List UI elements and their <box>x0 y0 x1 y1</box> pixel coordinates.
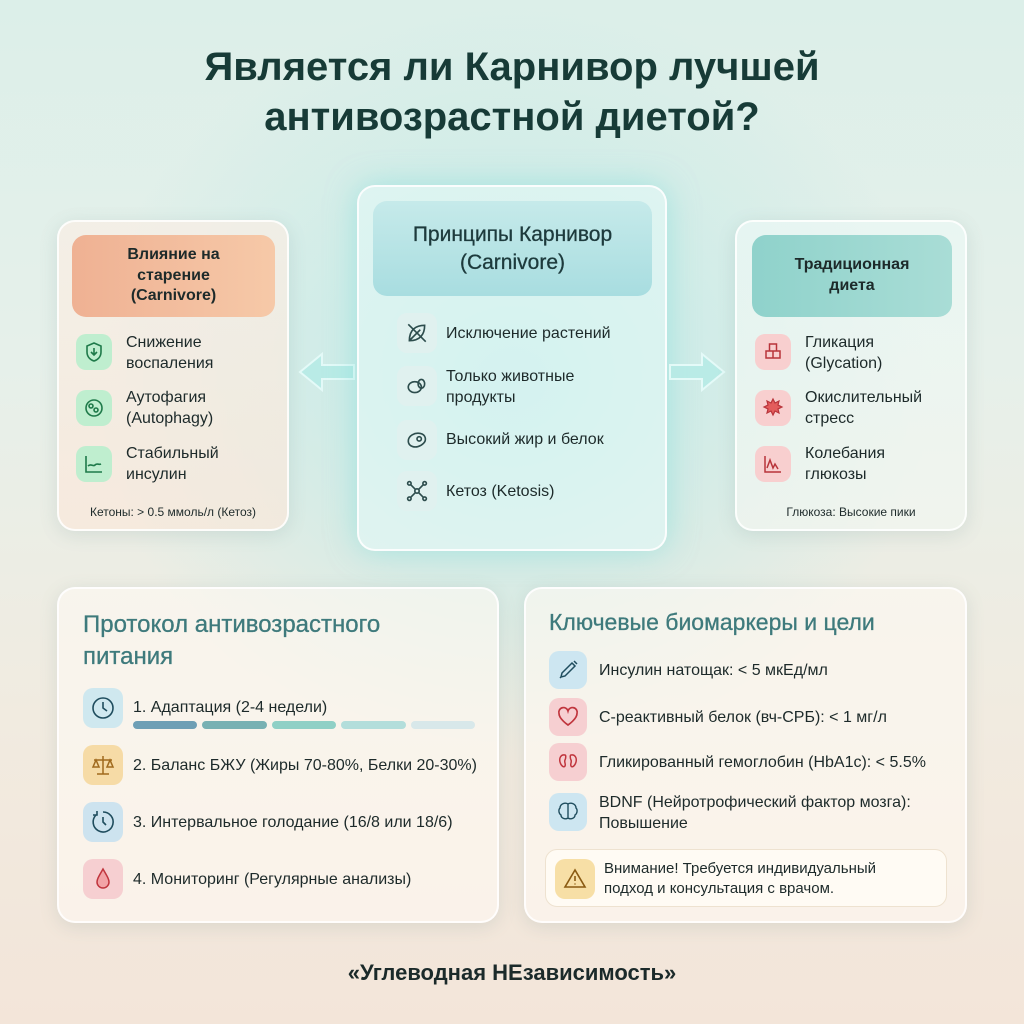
arrow: right <box>669 352 726 392</box>
heading: center: (Carnivore) <box>460 250 565 274</box>
icon: insulin chart <box>76 446 112 482</box>
text: autophagy: (Autophagy) <box>126 410 213 427</box>
text: (Glycation) <box>805 355 882 372</box>
text: Гликированный гемоглобин (HbA1c): < 5.5% <box>599 754 926 771</box>
text <box>805 334 882 372</box>
heading: left: старение <box>137 267 210 284</box>
heading: left: (Carnivore) <box>131 287 216 304</box>
text: BDNF (Нейротрофический фактор мозга): <box>599 794 911 811</box>
heading: protocol: Протокол антивозрастного <box>83 611 380 638</box>
text: Исключение растений <box>446 325 611 342</box>
title <box>204 45 820 139</box>
text: inflammation: воспаления <box>126 355 213 372</box>
icon: no plants <box>397 313 437 353</box>
icon: autophagy <box>76 390 112 426</box>
icon: brain <box>549 793 587 831</box>
arrow: left <box>298 352 355 392</box>
text: autophagy: Аутофагия <box>126 389 206 406</box>
icon: glucose spikes <box>755 446 791 482</box>
text: inflammation <box>126 334 213 372</box>
title: антивозрастной диетой? <box>264 95 760 139</box>
text: Колебания <box>805 445 885 462</box>
icon: heart <box>549 698 587 736</box>
text: Повышение <box>599 815 688 832</box>
text <box>599 794 911 832</box>
icon: oxidative stress <box>755 390 791 426</box>
text: Высокий жир и белок <box>446 431 604 448</box>
heading: right: диета <box>829 277 875 294</box>
callout: warning <box>545 849 947 907</box>
text: Окислительный <box>805 389 922 406</box>
text: С-реактивный белок (вч-СРБ): < 1 мг/л <box>599 709 887 726</box>
icon: clock <box>83 688 123 728</box>
icon: shield <box>76 334 112 370</box>
text: step 3: 3. Интервальное голодание (16/8 или 18/6) <box>133 814 453 831</box>
text: Только животные <box>446 368 574 385</box>
heading: left: Влияние на <box>127 246 220 263</box>
heading: protocol: питания <box>83 643 173 670</box>
icon: warning <box>555 859 595 899</box>
icon: scales <box>83 745 123 785</box>
heading: protocol <box>83 611 380 670</box>
text: autophagy <box>126 389 213 427</box>
text: step 2: 2. Баланс БЖУ (Жиры 70-80%, Белки 20-30%) <box>133 757 477 774</box>
icon: syringe <box>549 651 587 689</box>
icon: molecule <box>397 471 437 511</box>
heading: center <box>373 201 652 296</box>
text: insulin: инсулин <box>126 466 187 483</box>
footer brand: «Углеводная НЕзависимость» <box>348 960 676 985</box>
text <box>446 368 574 406</box>
footer note: glucose: Глюкоза: Высокие пики <box>786 505 916 519</box>
text: step 1: 1. Адаптация (2-4 недели) <box>133 699 327 716</box>
icon: kidneys <box>549 743 587 781</box>
footer note: ketones: Кетоны: > 0.5 ммоль/л (Кетоз) <box>90 505 256 519</box>
text: продукты <box>446 389 515 406</box>
text: warning: подход и консультация с врачом. <box>604 880 834 897</box>
heading: right: Традиционная <box>795 256 909 273</box>
title: Является ли Карнивор лучшей <box>204 45 820 89</box>
text: step 4: 4. Мониторинг (Регулярные анализы) <box>133 871 411 888</box>
heading: biomarkers: Ключевые биомаркеры и цели <box>549 609 875 635</box>
text <box>805 445 885 483</box>
progress bar <box>133 721 475 729</box>
text: стресс <box>805 410 854 427</box>
icon: animal products <box>397 366 437 406</box>
icon: drop <box>83 859 123 899</box>
panel: left (Влияние на старение) <box>57 220 289 531</box>
panel: right (Традиционная диета) <box>735 220 967 531</box>
text: Инсулин натощак: < 5 мкЕд/мл <box>599 662 828 679</box>
panel: center (Принципы) <box>357 185 667 551</box>
text: insulin <box>126 445 219 483</box>
text: insulin: Стабильный <box>126 445 219 462</box>
panel: protocol <box>57 587 499 923</box>
text: Кетоз (Ketosis) <box>446 483 554 500</box>
text: inflammation: Снижение <box>126 334 202 351</box>
text: Гликация <box>805 334 874 351</box>
text: warning: Внимание! Требуется индивидуальный <box>604 860 876 877</box>
text <box>805 389 922 427</box>
heading: left <box>72 235 275 317</box>
icon: glycation <box>755 334 791 370</box>
icon: fasting clock <box>83 802 123 842</box>
text: warning <box>604 860 876 897</box>
heading: center: Принципы Карнивор <box>413 223 612 246</box>
panel: biomarkers <box>524 587 967 923</box>
heading: right <box>752 235 952 317</box>
icon: steak <box>397 420 437 460</box>
text: глюкозы <box>805 466 867 483</box>
